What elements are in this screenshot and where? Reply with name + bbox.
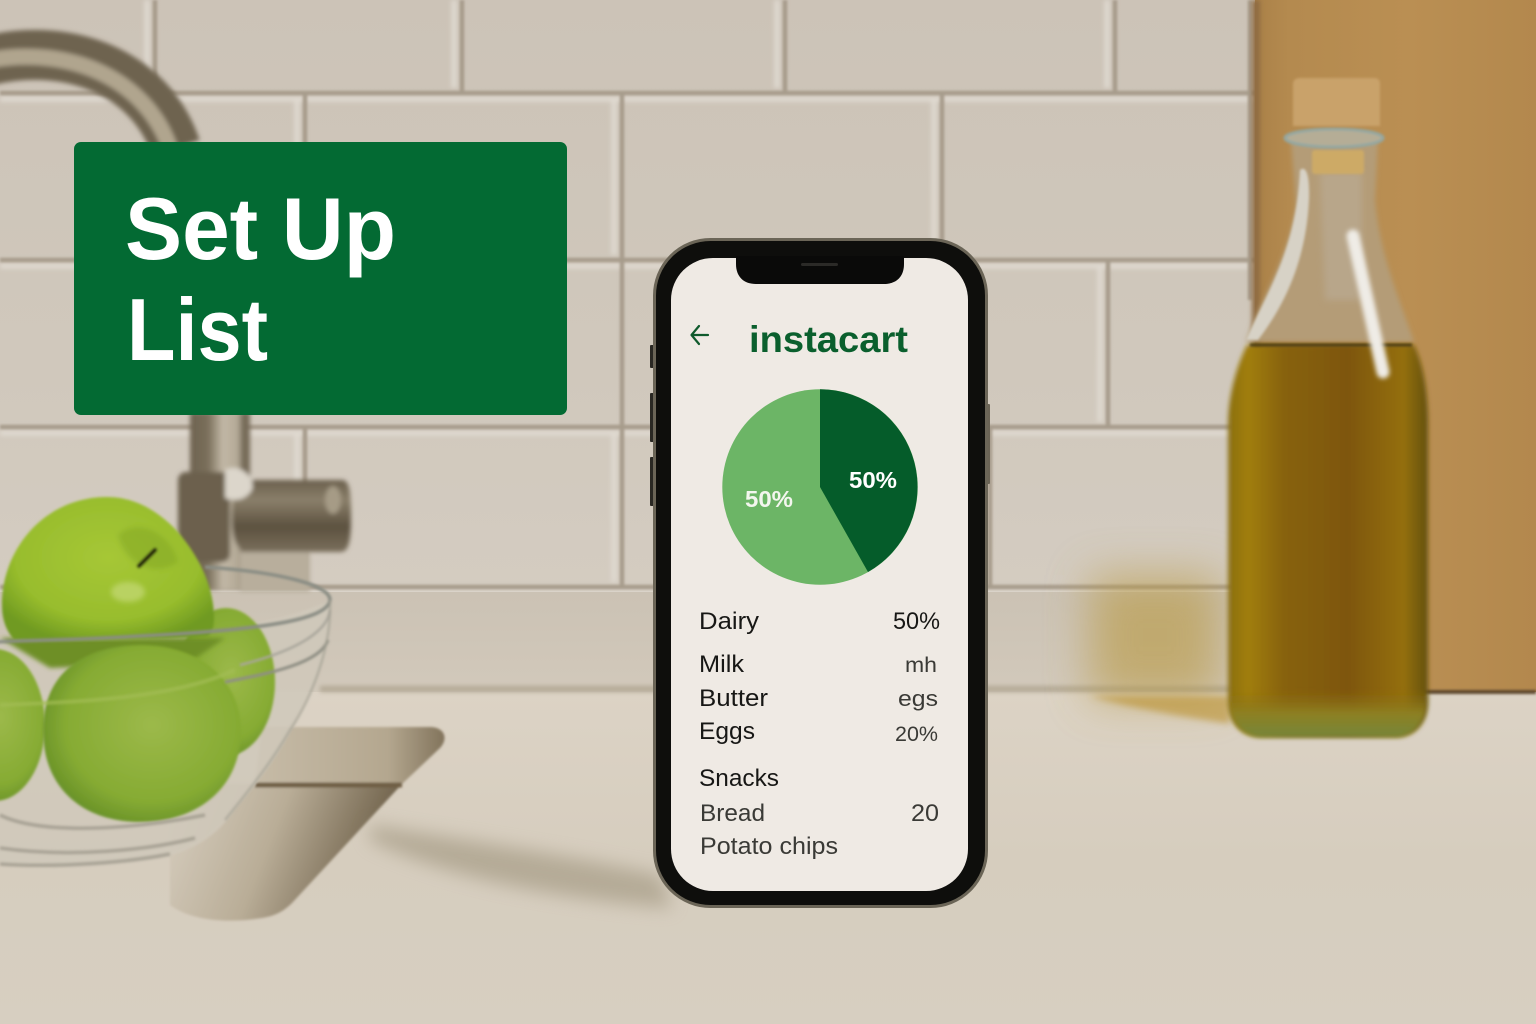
pie chart: 50% xyxy=(745,486,793,512)
phone screen xyxy=(671,258,968,891)
shopping list: 50% xyxy=(893,608,940,635)
sink basin xyxy=(170,727,445,921)
side buttons xyxy=(650,345,990,506)
bottle rim xyxy=(1285,129,1383,147)
oil surface line xyxy=(1250,344,1412,346)
bowl glass body xyxy=(0,600,330,867)
title text: Set Up xyxy=(125,179,396,278)
shopping list: Snacks xyxy=(699,765,779,792)
shopping list: Milk xyxy=(699,651,745,678)
faucet body xyxy=(178,412,351,592)
shopping list: mh xyxy=(905,654,937,677)
shopping list: 20 xyxy=(911,800,939,827)
shopping list: egs xyxy=(898,686,938,711)
instacart logo text: instacart xyxy=(749,319,908,360)
shopping list: Potato chips xyxy=(700,833,838,860)
inner cork xyxy=(1312,150,1364,174)
apple stem xyxy=(139,550,155,566)
wooden cutting board xyxy=(1252,0,1536,694)
faucet xyxy=(0,55,351,592)
backsplash band and countertop xyxy=(0,592,1536,1024)
olive oil caustic glow xyxy=(1090,575,1220,700)
pie chart xyxy=(722,389,918,585)
glass bowl with apples xyxy=(0,497,330,867)
oil fill xyxy=(1228,345,1428,737)
bottle glass xyxy=(1246,140,1414,342)
oil base tint xyxy=(1230,690,1426,737)
bowl rim xyxy=(0,567,330,820)
top apple xyxy=(2,497,214,641)
green water band xyxy=(0,670,235,705)
back arrow icon xyxy=(692,326,708,344)
shopping list: Dairy xyxy=(699,608,760,635)
left apple xyxy=(0,649,45,801)
cork xyxy=(1293,78,1380,126)
faucet spout xyxy=(0,55,176,148)
gap shadow between apples xyxy=(0,638,225,668)
shopping list: 20% xyxy=(895,723,938,746)
title text xyxy=(125,179,396,379)
olive oil bottle xyxy=(1228,78,1428,737)
notch xyxy=(736,256,904,284)
phone shadow on counter xyxy=(370,825,672,908)
front apple xyxy=(43,645,241,822)
pie chart: 50% xyxy=(849,467,897,493)
smartphone xyxy=(650,240,990,906)
counter caustic streak xyxy=(1090,696,1230,724)
title text: List xyxy=(127,280,268,379)
bottle neck shading xyxy=(1320,172,1362,300)
back right apple xyxy=(177,608,275,756)
speaker xyxy=(801,263,838,266)
green title banner xyxy=(74,142,567,415)
right glass reflection xyxy=(1353,236,1383,372)
shopping list xyxy=(699,608,940,860)
phone body xyxy=(654,240,986,906)
shopping list: Bread xyxy=(700,800,765,827)
left glass reflection xyxy=(1246,169,1309,340)
bowl bottom glass xyxy=(0,815,205,865)
shopping list: Butter xyxy=(699,685,768,712)
shopping list: Eggs xyxy=(699,718,755,745)
tiled wall xyxy=(0,0,1536,600)
